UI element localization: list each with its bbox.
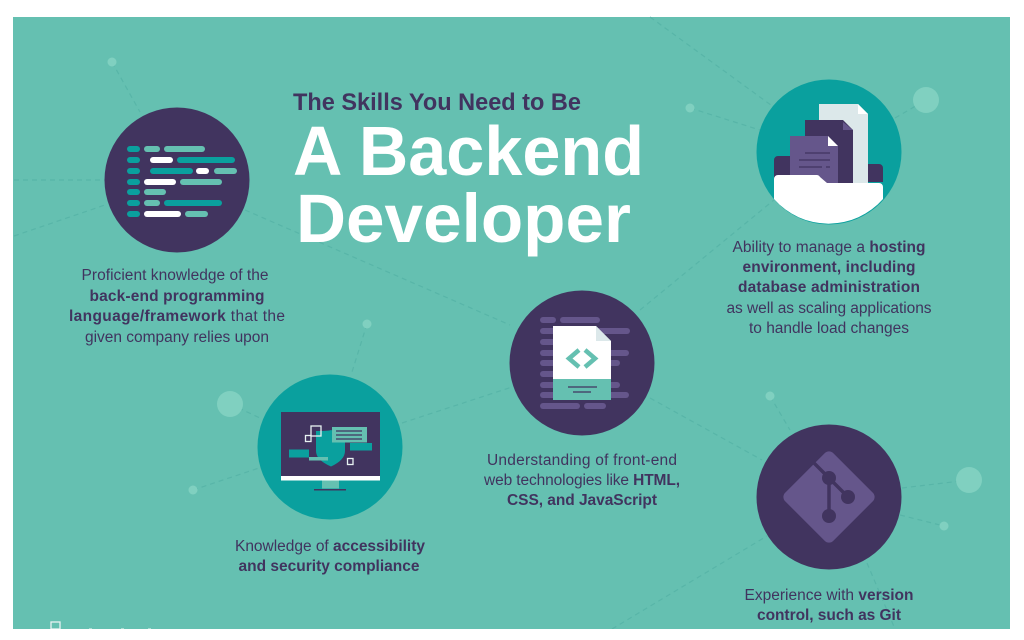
text: hosting environment: database administration: [738, 279, 920, 296]
decorative nodes: [108, 58, 982, 530]
text: accessibility and security: and security compliance: [238, 558, 420, 575]
panel: front-end technologies: [483, 290, 680, 509]
text: programming language: given company relies upon: [85, 329, 269, 346]
icon: code lines: [104, 108, 250, 252]
title: A Backend: [293, 112, 644, 190]
text: hosting environment: to handle load changes: [749, 320, 909, 337]
panel: accessibility and security: [235, 374, 425, 575]
text: accessibility and security: Knowledge of accessibility: [235, 538, 425, 555]
panel: hosting environment: [726, 80, 932, 337]
text: hosting environment: environment, including: [742, 259, 916, 276]
icon: monitor with shield: [258, 374, 402, 520]
text: front-end technologies: CSS, and JavaScript: [507, 492, 657, 509]
logo fragment: [51, 622, 151, 629]
text: front-end technologies: Understanding of front-end: [487, 452, 677, 469]
title: The Skills You Need to Be: [293, 89, 581, 116]
title: [293, 89, 644, 257]
panel: version control: [744, 424, 914, 624]
text: programming language: language/framework that the: [69, 308, 285, 325]
icon: git logo: [756, 424, 902, 570]
text: hosting environment: as well as scaling applications: [726, 300, 932, 317]
text: front-end technologies: web technologies like HTML,: [484, 472, 680, 489]
icon: folder with documents: [756, 80, 902, 224]
icon: code document: [510, 290, 654, 436]
text: programming language: Proficient knowledge of the: [82, 267, 268, 284]
text: programming language: back-end programming: [90, 288, 264, 305]
panel: programming language: [69, 108, 285, 346]
text: version control: Experience with version: [744, 587, 914, 604]
text: version control: control, such as Git: [757, 607, 901, 624]
title: Developer: [296, 180, 631, 257]
text: hosting environment: Ability to manage a hosting: [732, 239, 926, 256]
